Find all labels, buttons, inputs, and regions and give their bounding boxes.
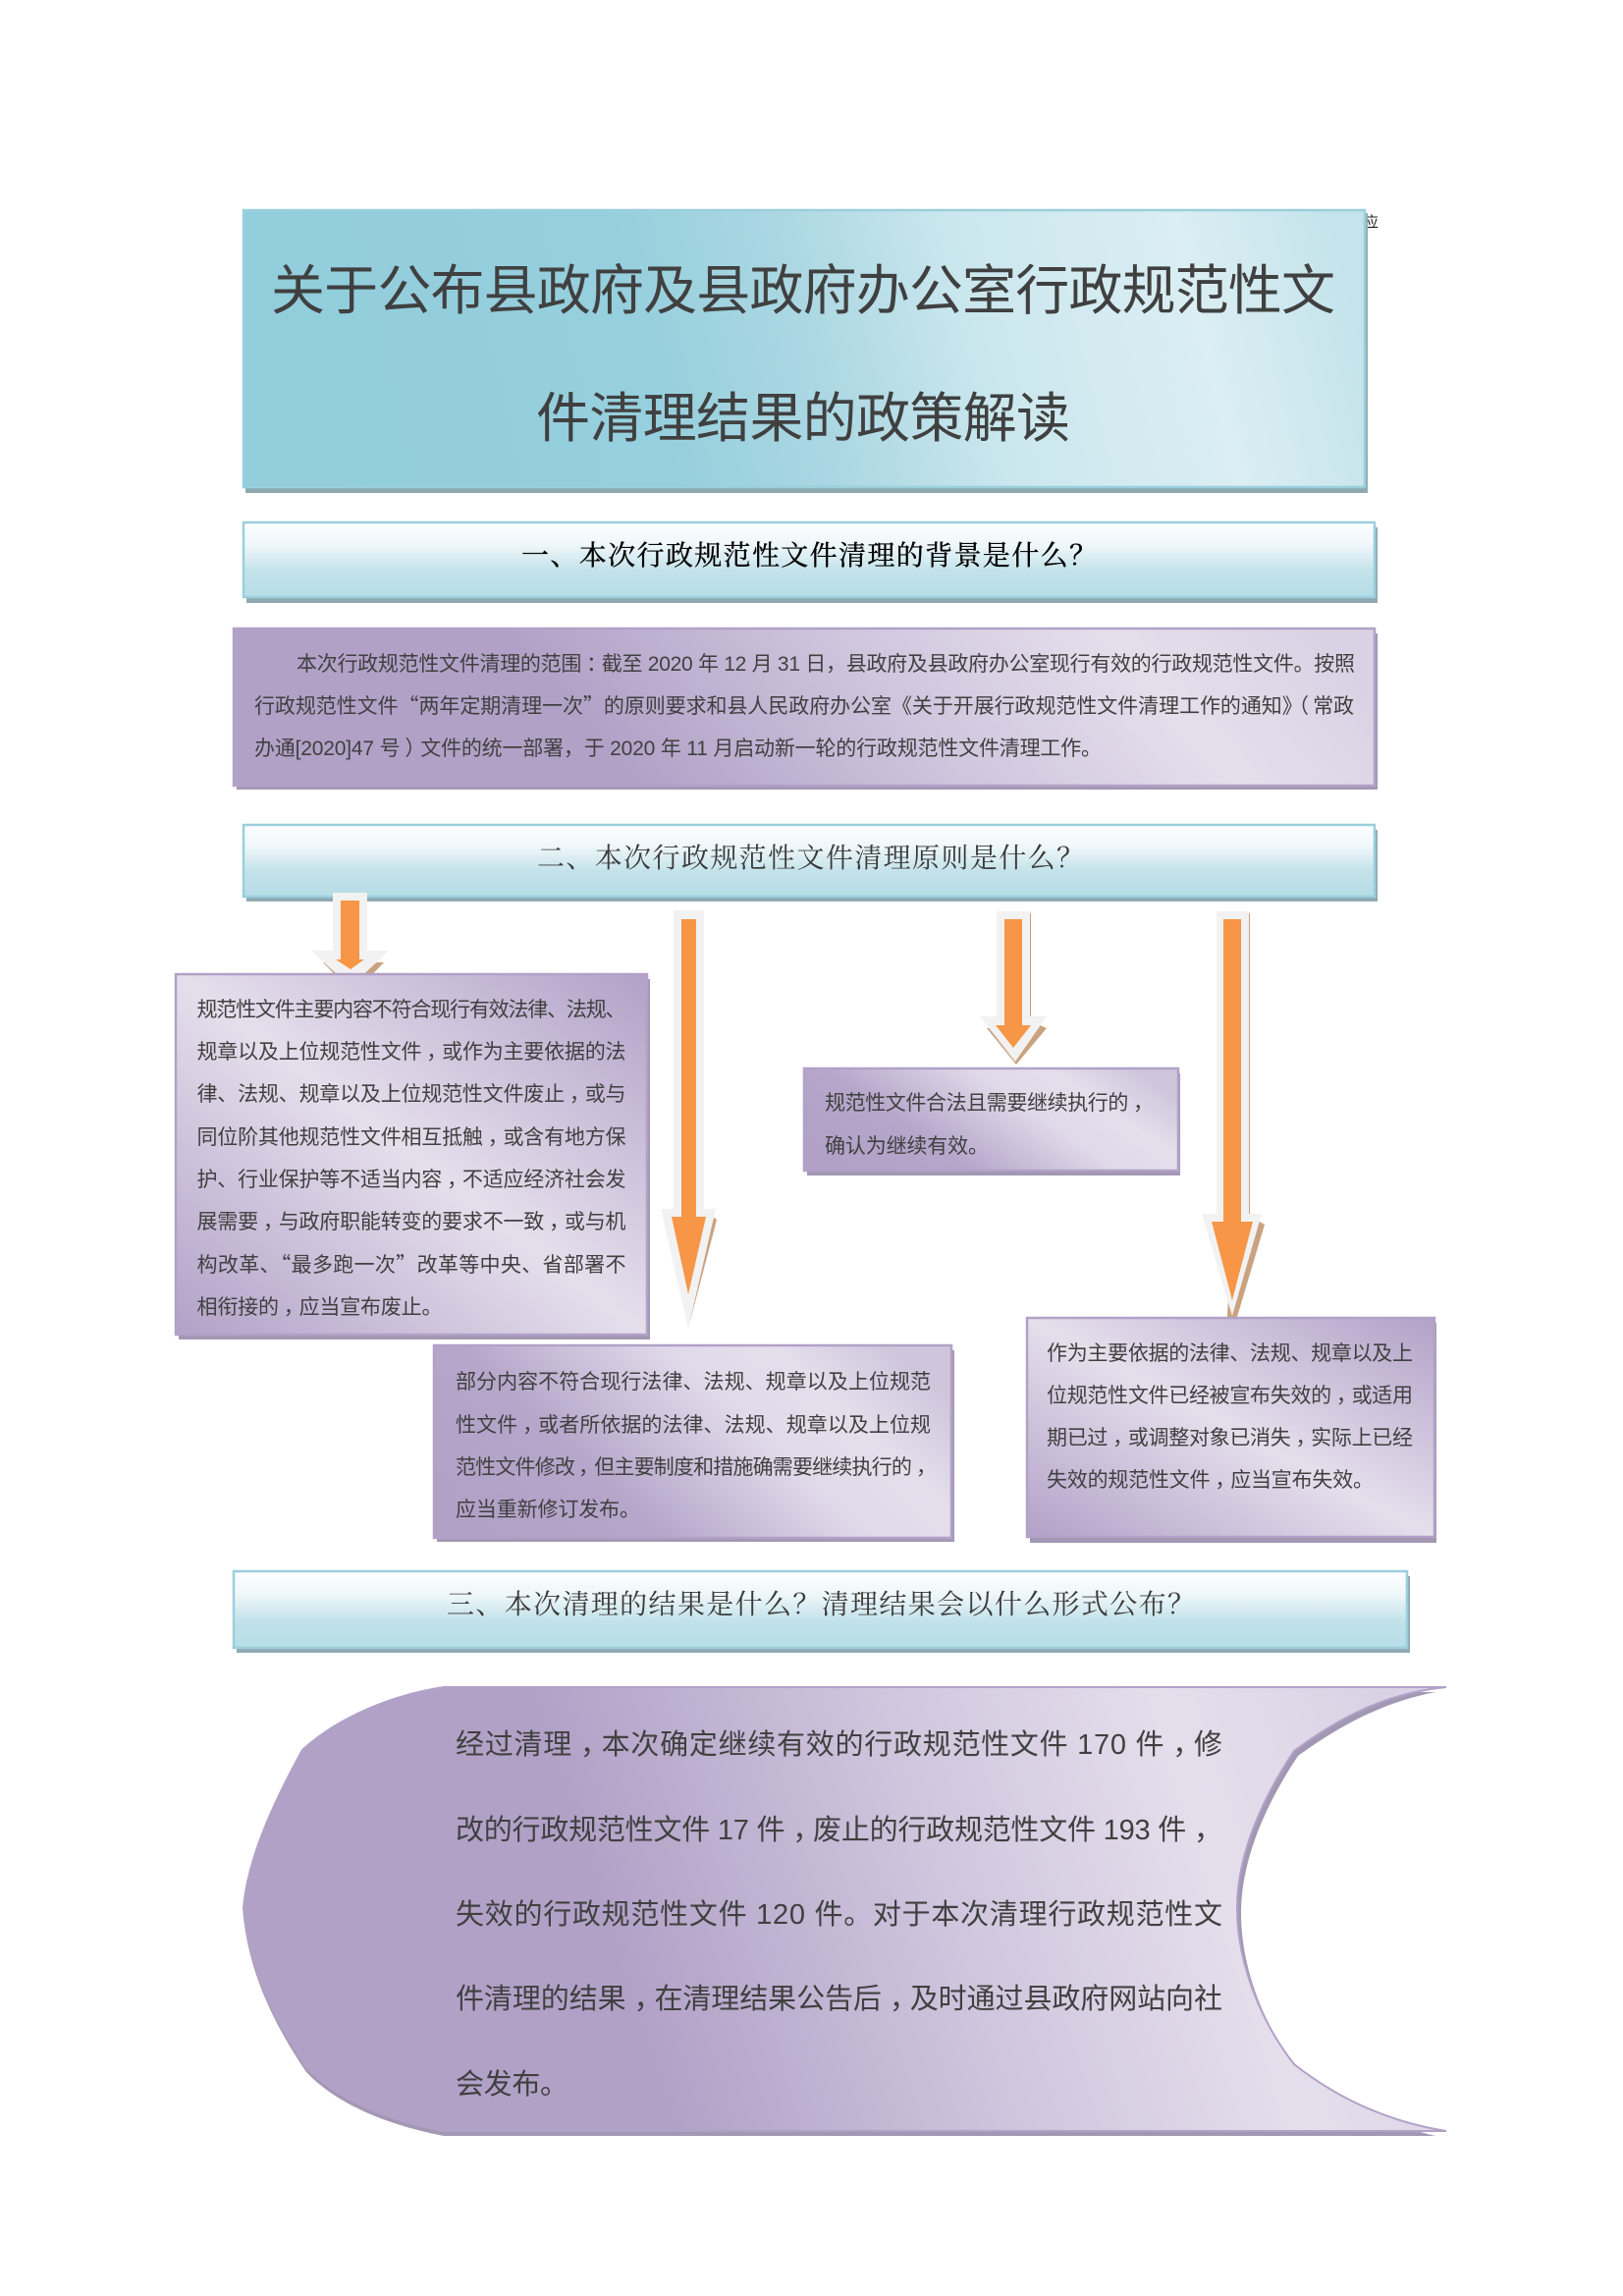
panel: abolish principle: 相衔接的，应当宣布废止。 [196,1296,442,1319]
panel: continue valid principle: 规范性文件合法且需要继续执行的， [825,1092,1154,1115]
panel: continue valid principle [804,1068,1180,1175]
heading: section two [243,825,1378,902]
panel: abolish principle: 规章以及上位规范性文件，或作为主要依据的法 [196,1041,626,1064]
panel: abolish principle: 护、行业保护等不适当内容，不适应经济社会发 [196,1169,626,1191]
panel: abolish principle [176,974,650,1339]
panel: revise principle: 性文件，或者所依据的法律、法规、规章以及上位规 [456,1414,931,1437]
panel: result ribbon: 会发布。 [456,2068,568,2101]
panel: background text: 办通[2020]47 号）文件的统一部署，于 2020 年 11 月启动新一轮的行政规范性文件清理工作。 [254,738,1102,760]
panel: continue valid principle: 确认为继续有效。 [825,1135,989,1158]
arrow: to valid box [980,911,1047,1065]
panel: invalid principle: 失效的规范性文件，应当宣布失效。 [1047,1469,1374,1492]
arrow: to abolish box [311,893,389,994]
panel: abolish principle: 律、法规、规章以及上位规范性文件废止，或与 [196,1083,626,1106]
panel: result ribbon: 件清理的结果 ，在清理结果公告后 ，及时通过县政府网站向社 [456,1983,1222,2015]
panel: result ribbon: 改的行政规范性文件 17 件 ，废止的行政规范性文件 193 件 ， [456,1814,1222,1846]
panel: revise principle: 应当重新修订发布。 [456,1499,640,1521]
panel: result ribbon [243,1687,1446,2136]
panel: invalid principle: 位规范性文件已经被宣布失效的，或适用 [1047,1385,1413,1407]
panel: background text: 本次行政规范性文件清理的范围：截至 2020 年 12 月 31 日，县政府及县政府办公室现行有效的行政规范性文件。按照 [297,653,1355,676]
heading: section one [243,522,1378,603]
heading: section three: 三、本次清理的结果是什么？清理结果会以什么形式公布？ [447,1589,1195,1620]
arrow: to invalid box [1202,911,1265,1317]
panel: result ribbon: 失效的行政规范性文件 120 件。对于本次清理行政规范性文 [456,1898,1222,1931]
heading: section two: 二、本次行政规范性文件清理原则是什么？ [537,843,1084,874]
title panel: 件清理结果的政策解读 [536,388,1070,449]
panel: invalid principle: 作为主要依据的法律、法规、规章以及上 [1047,1342,1413,1365]
panel: invalid principle: 期已过，或调整对象已消失，实际上已经 [1047,1427,1413,1449]
panel: abolish principle: 规范性文件主要内容不符合现行有效法律、法规、 [196,999,626,1021]
title panel: 关于公布县政府及县政府办公室行政规范性文 [271,260,1335,321]
panel: background text: 行政规范性文件“两年定期清理一次”的原则要求和县人民政府办公室《关于开展行政规范性文件清理工作的通知》（常政 [254,690,1354,720]
stray character behind title: 应 [1364,213,1379,231]
arrow: to revise box [661,910,717,1329]
panel: invalid principle [1027,1318,1436,1543]
heading: section three [234,1571,1410,1653]
panel: revise principle [434,1345,954,1542]
panel: abolish principle: 同位阶其他规范性文件相互抵触，或含有地方保 [196,1126,626,1149]
panel: background text [234,629,1378,790]
panel: abolish principle: 展需要，与政府职能转变的要求不一致，或与机 [196,1211,626,1233]
heading: section one: 一、本次行政规范性文件清理的背景是什么？ [521,540,1097,572]
panel: revise principle: 范性文件修改，但主要制度和措施确需要继续执行的， [456,1456,937,1479]
panel: revise principle: 部分内容不符合现行法律、法规、规章以及上位规范 [456,1371,931,1394]
panel: result ribbon: 经过清理 ，本次确定继续有效的行政规范性文件 170 件 ，修 [456,1728,1222,1761]
panel: abolish principle: 构改革、“最多跑一次”改革等中央、省部署不 [196,1249,626,1279]
title panel [243,210,1368,493]
